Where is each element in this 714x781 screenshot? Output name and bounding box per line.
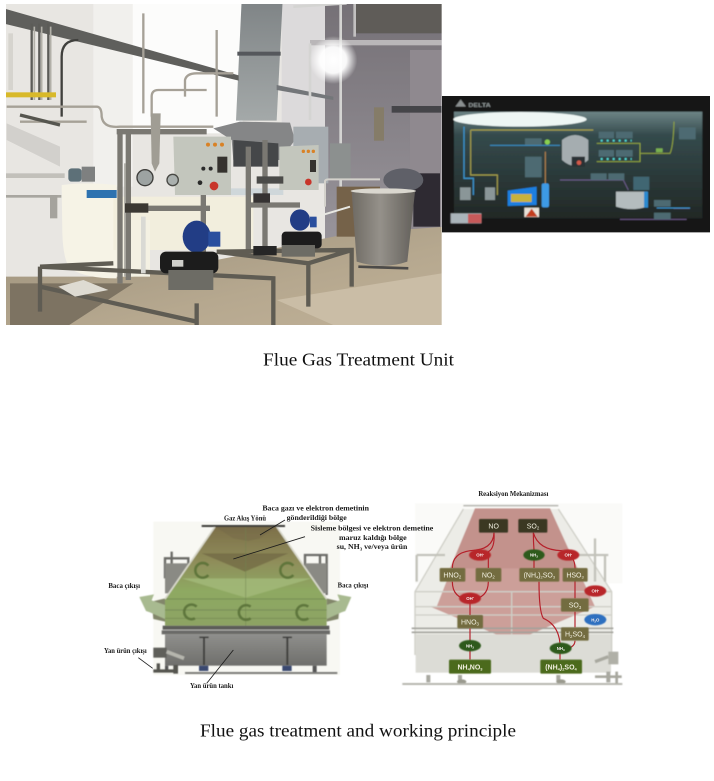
- labels: cross-section annotations: Baca çıkışı: [108, 582, 140, 590]
- reaction labels: 2: [594, 619, 596, 623]
- labels: cross-section annotations: Yan ürün tankı: [190, 682, 233, 690]
- labels: cross-section annotations: ve/veya ürün: [362, 543, 407, 551]
- reaction labels: 3: [480, 667, 483, 672]
- reaction labels: (NH: [524, 572, 536, 579]
- photo: control touch screen: [440, 90, 713, 233]
- reaction pathways: [452, 533, 575, 660]
- reaction labels: HSO: [566, 572, 581, 579]
- reaction labels: NH: [530, 553, 536, 558]
- reaction labels: 3: [472, 645, 474, 649]
- reaction labels: OH: [476, 553, 483, 558]
- reaction labels: 4: [558, 667, 561, 672]
- reaction labels: H: [565, 632, 570, 639]
- labels: cross-section annotations: Baca gazı ve elektron demetinin: [262, 505, 369, 513]
- reaction labels: 4: [575, 667, 578, 672]
- reaction labels: SO: [543, 572, 553, 579]
- labels: cross-section annotations: [104, 505, 433, 690]
- reaction labels: ): [538, 572, 541, 579]
- reaction labels: NO: [470, 664, 481, 671]
- labels: cross-section annotations: Sisleme bölgesi ve elektron demetine: [311, 524, 433, 532]
- heading: reaction mechanism: Reaksiyon Mekanizması: [478, 490, 548, 498]
- reaction labels: 2: [570, 634, 573, 639]
- reaction labels: NH: [466, 643, 472, 648]
- reaction labels: 3: [581, 575, 584, 580]
- reaction labels: OH: [592, 589, 598, 594]
- reaction labels: 4: [468, 667, 471, 672]
- reaction labels: O: [596, 617, 600, 622]
- reaction labels: •: [571, 552, 572, 556]
- reaction labels: NH: [457, 664, 468, 671]
- reaction labels: 2: [537, 526, 540, 531]
- reaction labels: NO: [488, 523, 499, 530]
- reaction nodes: [440, 519, 606, 674]
- labels: cross-section annotations: 3: [360, 546, 363, 551]
- diagram: reaction mechanism: [402, 490, 622, 684]
- labels: cross-section annotations: su, NH: [337, 543, 357, 551]
- reaction labels: HNO: [443, 572, 459, 579]
- reaction labels: 2: [492, 575, 495, 580]
- labels: cross-section annotations: maruz kaldığı bölge: [339, 534, 407, 542]
- reaction labels: 3: [579, 605, 582, 610]
- photo: flue gas treatment unit: [0, 0, 450, 330]
- logo: DELTA: [468, 103, 491, 109]
- reaction labels: SO: [527, 523, 537, 530]
- reaction labels: 2: [562, 667, 565, 672]
- reaction labels: SO: [569, 603, 579, 610]
- reaction labels: 3: [477, 622, 480, 627]
- reaction labels: NH: [557, 646, 563, 651]
- reaction labels: •: [473, 596, 474, 600]
- reaction labels: 2: [459, 575, 462, 580]
- diagram: flue gas treatment cross-section: [138, 520, 351, 683]
- reaction labels: SO: [564, 664, 575, 671]
- labels: cross-section annotations: Yan ürün çıkışı: [104, 647, 147, 655]
- reaction labels: 3: [563, 648, 565, 652]
- caption: flue gas treatment unit: Flue Gas Treatment Unit: [263, 350, 454, 370]
- labels: cross-section annotations: Gaz Akış Yönü: [224, 514, 266, 522]
- pumps: [183, 221, 211, 253]
- reaction labels: 4: [536, 575, 539, 580]
- gauges: [137, 170, 153, 186]
- steel vessel: [352, 192, 415, 266]
- reaction labels: H: [591, 617, 594, 622]
- reaction labels: HNO: [461, 619, 477, 626]
- reaction labels: OH: [466, 596, 473, 601]
- reaction labels: 3: [536, 555, 538, 559]
- reaction labels: OH: [565, 553, 571, 558]
- reaction labels: •: [483, 552, 484, 556]
- reaction labels: 4: [583, 634, 586, 639]
- vessel background: [402, 503, 622, 684]
- caption: flue gas treatment and working principle: Flue gas treatment and working principle: [200, 720, 516, 740]
- white tank: [62, 183, 117, 278]
- reaction labels: NO: [482, 572, 492, 579]
- reaction labels: •: [598, 588, 599, 592]
- reaction labels: 3: [553, 575, 556, 580]
- reaction labels: SO: [572, 632, 583, 639]
- reaction labels: ): [560, 664, 562, 671]
- control panels: [173, 137, 231, 195]
- steel frame: [117, 130, 300, 283]
- labels: cross-section annotations: Baca çıkışı: [338, 581, 368, 589]
- reaction labels: 2: [541, 575, 544, 580]
- labels: cross-section annotations: gönderildiği bölge: [287, 514, 347, 522]
- reaction labels: [443, 523, 600, 672]
- reaction labels: (NH: [545, 664, 558, 671]
